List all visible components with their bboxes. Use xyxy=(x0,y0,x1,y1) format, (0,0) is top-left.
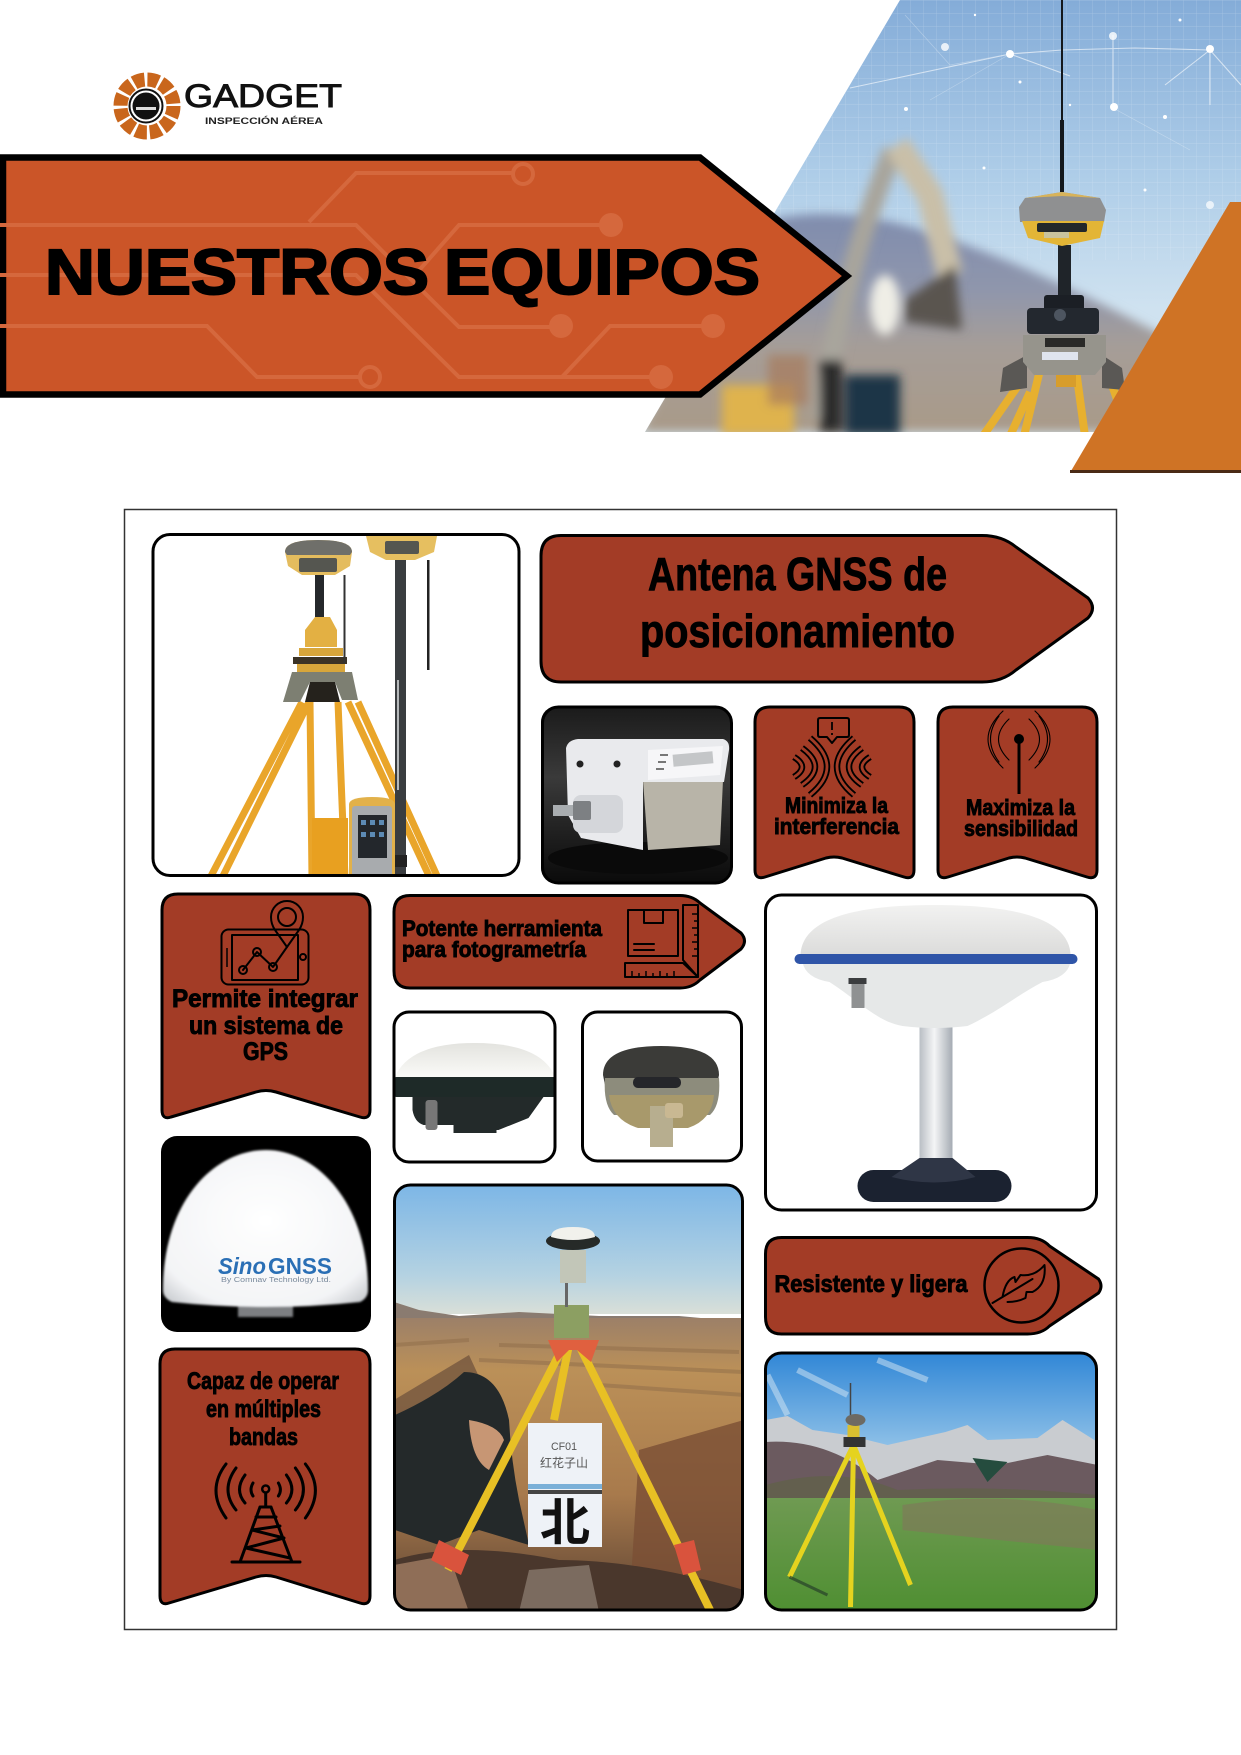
photo: dome antenna black band xyxy=(392,1011,558,1163)
photo: compact GNSS receiver xyxy=(582,1011,742,1162)
photo: technician with tripod on mountain: 红花子山 xyxy=(540,1455,588,1470)
photo: SinoGNSS white radome: Sino xyxy=(218,1253,266,1279)
title xyxy=(45,236,760,308)
photo: technician with tripod on mountain: 北 xyxy=(540,1495,590,1551)
ribbon: Minimiza la interferencia xyxy=(755,707,914,878)
icon: box and ruler xyxy=(625,905,698,977)
header photo: GNSS antenna with excavator xyxy=(640,0,1241,440)
photo: SinoGNSS white radome xyxy=(161,1136,372,1333)
ribbon: Capaz de operar en múltiples bandas: bandas xyxy=(229,1424,298,1451)
photo: SinoGNSS white radome: By Comnav Technology Ltd. xyxy=(221,1277,331,1284)
logo: Gadget Inspección Aérea: INSPECCIÓN AÉREA xyxy=(205,115,323,127)
arrow heading: Antena GNSS xyxy=(541,536,1092,682)
icon: tablet with map pin xyxy=(222,901,308,984)
title: EQUIPOS xyxy=(444,236,760,308)
ribbon: Capaz de operar en múltiples bandas xyxy=(160,1349,370,1604)
arrow: Potente herramienta para fotogrametría: Potente herramienta xyxy=(402,916,603,941)
logo: Gadget Inspección Aérea: GADGET xyxy=(184,78,342,114)
main content frame xyxy=(124,510,1116,1630)
ribbon: Maximiza la sensibilidad: sensibilidad xyxy=(964,816,1078,841)
ribbon: Minimiza la interferencia: interferencia xyxy=(774,814,900,839)
icon: feather in circle xyxy=(984,1248,1058,1322)
photo: technician with tripod on mountain: CF01 xyxy=(551,1441,577,1453)
photo: SinoGNSS white radome: GNSS xyxy=(268,1253,332,1279)
title: NUESTROS xyxy=(45,236,429,308)
arrow heading: Antena GNSS: Antena GNSS de xyxy=(648,548,947,600)
photo: white antenna with blue ring on pole xyxy=(766,894,1098,1211)
ribbon: Capaz de operar en múltiples bandas: en múltiples xyxy=(206,1396,321,1423)
photo: white module on black background xyxy=(541,706,732,884)
title banner arrow xyxy=(0,158,847,394)
ribbon: Maximiza la sensibilidad xyxy=(938,707,1097,878)
ribbon: Permite integrar un sistema de GPS xyxy=(162,894,370,1118)
logo: Gadget Inspección Aérea xyxy=(120,78,342,132)
ribbon: Permite integrar un sistema de GPS: un sistema de xyxy=(189,1012,343,1040)
icon: radio tower xyxy=(216,1464,315,1562)
arrow heading: Antena GNSS: posicionamiento xyxy=(640,605,955,657)
ribbon: Permite integrar un sistema de GPS: GPS xyxy=(243,1038,288,1066)
ribbon: Permite integrar un sistema de GPS: Permite integrar xyxy=(172,985,358,1013)
arrow: Resistente y ligera xyxy=(766,1238,1101,1334)
photo: tripod in green meadow with mountains xyxy=(766,1352,1098,1611)
icon: antenna signal xyxy=(988,711,1050,794)
ribbon: Maximiza la sensibilidad: Maximiza la xyxy=(966,795,1076,820)
arrow: Resistente y ligera: Resistente y ligera xyxy=(774,1271,968,1298)
logo gear xyxy=(120,80,174,132)
photo: tripod with yellow GNSS receivers xyxy=(153,534,521,878)
arrow: Potente herramienta para fotogrametría xyxy=(394,896,744,988)
arrow: Potente herramienta para fotogrametría: para fotogrametría xyxy=(402,937,587,962)
photo: technician with tripod on mountain xyxy=(394,1184,744,1612)
ribbon: Minimiza la interferencia: Minimiza la xyxy=(785,793,889,818)
orange corner triangle xyxy=(1070,202,1241,473)
icon: signal interference xyxy=(794,718,870,795)
ribbon: Capaz de operar en múltiples bandas: Capaz de operar xyxy=(187,1368,339,1395)
